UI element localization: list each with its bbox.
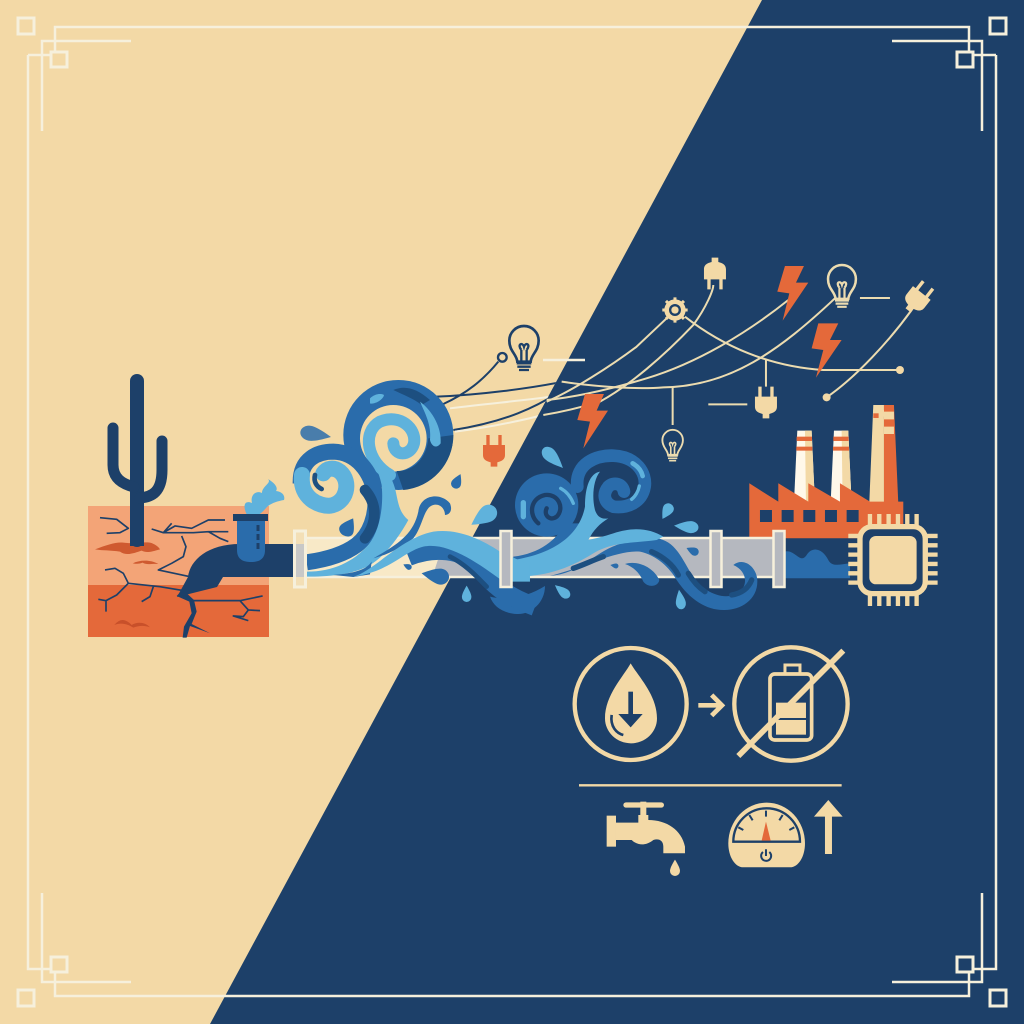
wires network, coloured per background side — [437, 285, 912, 432]
icon: navy light bulb — [509, 326, 539, 370]
icon: cream plug top — [704, 258, 726, 289]
background: navy diagonal side — [210, 0, 1024, 1024]
droplets — [299, 424, 501, 602]
bottom left wave tail — [490, 586, 545, 614]
icon: lightning bolt middle — [812, 323, 842, 378]
blue water behind chip — [784, 550, 850, 578]
icon: water drop falling in a circle — [575, 648, 687, 760]
cactus — [113, 381, 162, 546]
divider line — [579, 782, 842, 789]
icon: top right cream bulb — [828, 265, 856, 307]
icon: upward arrow — [814, 800, 843, 854]
icon: small junction ring — [498, 353, 507, 362]
main blue wave body — [550, 538, 757, 610]
icon: faucet dripping — [607, 802, 685, 876]
droplets — [539, 444, 700, 610]
blue splash blob — [625, 563, 659, 586]
status icons panel — [575, 647, 848, 876]
light trunk and band — [513, 472, 663, 577]
right navy-side swirl — [577, 456, 645, 507]
icon: battery crossed out — [734, 647, 848, 761]
left navy-side swirl — [515, 473, 578, 537]
water waves right half — [490, 444, 757, 614]
big swirl ring — [343, 380, 453, 490]
microchip — [848, 514, 938, 606]
water spray from valve — [245, 479, 284, 515]
trunk light — [307, 453, 408, 577]
icon: cream plug tilted — [899, 278, 937, 317]
pipe flanges — [294, 531, 784, 587]
icon: gear node — [662, 297, 688, 323]
icon: small cream bulb — [662, 430, 683, 461]
faucet at pipe start — [177, 479, 294, 597]
icons above the wires — [483, 258, 937, 578]
darker blue under trunk — [513, 523, 583, 568]
left swirl light ring — [302, 469, 346, 506]
left swirl upper blue — [301, 452, 375, 562]
factory — [749, 405, 903, 538]
arrow between circles — [698, 695, 722, 716]
icon: lightning bolt left — [577, 394, 608, 448]
icon: orange plug — [483, 435, 505, 467]
inner light spiral — [369, 419, 414, 475]
cracked soil block — [88, 506, 269, 638]
icon: pressure gauge — [728, 803, 805, 867]
pipeline — [293, 538, 784, 578]
lower wave — [408, 551, 535, 607]
blue patch on band — [333, 562, 372, 577]
end dots — [823, 366, 904, 401]
icon: lightning bolt top — [777, 266, 808, 321]
icon: cream plug lower — [755, 387, 777, 418]
long light band — [353, 531, 530, 582]
water waves left half — [299, 380, 535, 607]
crest — [373, 496, 451, 558]
